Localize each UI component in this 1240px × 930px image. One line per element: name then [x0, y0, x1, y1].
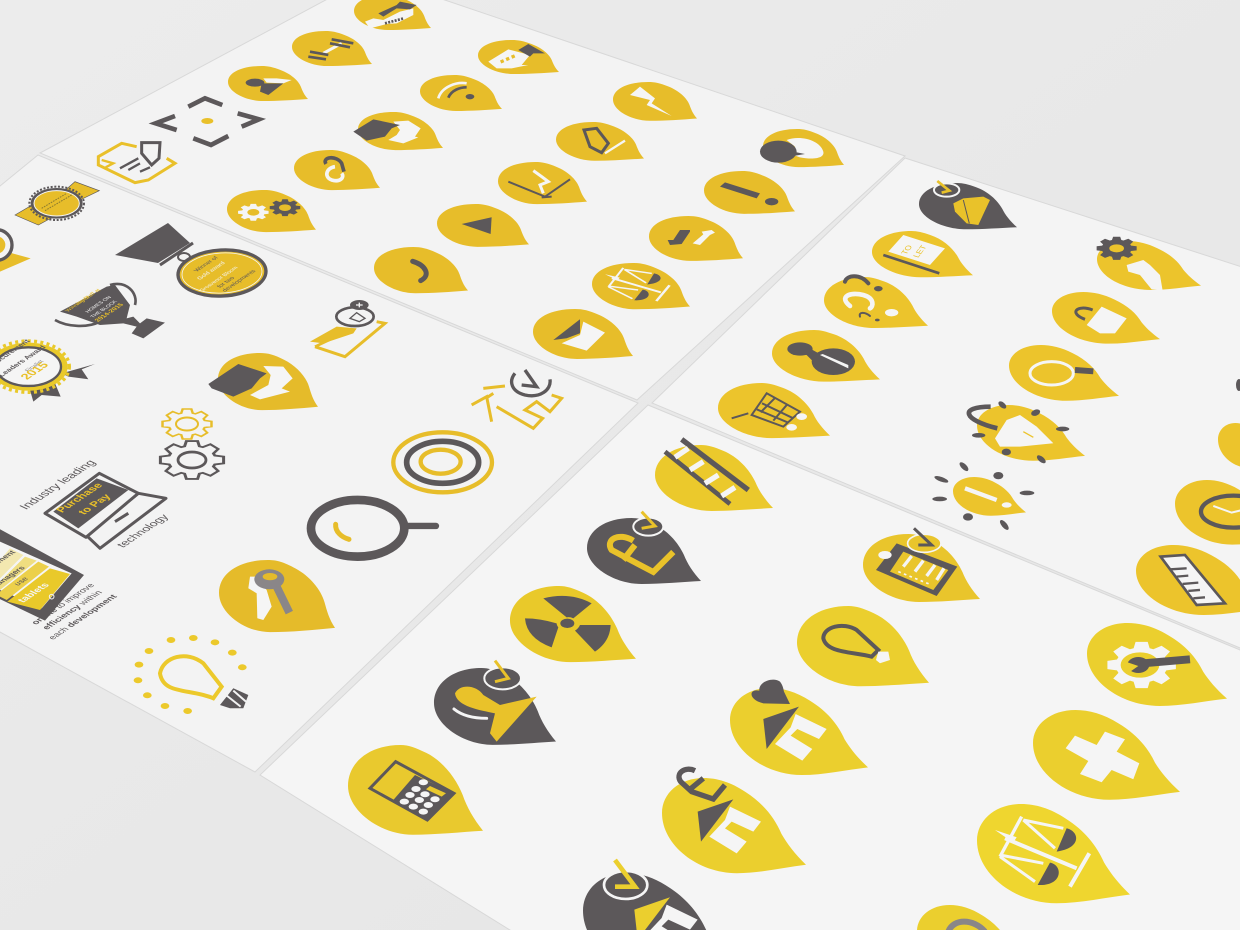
- to let text: LET: [911, 244, 929, 259]
- pin: wrench: [1097, 237, 1201, 291]
- pin: question marks: [824, 276, 928, 328]
- text: onsite note: efficiency within: [40, 589, 104, 631]
- pin: tick house: [583, 860, 733, 930]
- pin: cart: [718, 383, 830, 438]
- pin: phone: [374, 247, 468, 293]
- medal text: [193, 256, 258, 293]
- trophy text: HOMES ON: [84, 295, 113, 314]
- panel: top sheet: [40, 0, 905, 400]
- medal text: Gold award: [196, 261, 227, 281]
- pin: clipboard: [863, 528, 980, 602]
- pin: key: [219, 560, 335, 632]
- panel: bottom sheet: [260, 405, 1240, 930]
- pin: hard hat: [919, 181, 1017, 229]
- text: technology: technology: [115, 513, 172, 549]
- medal text: developments: [221, 269, 258, 293]
- text: onsite note: each development: [46, 593, 119, 641]
- trophy text: Winning Staff at: [64, 288, 103, 313]
- pin: lightning: [613, 82, 697, 121]
- icon: magnifier: [311, 500, 436, 557]
- pin: person with tie: [772, 330, 880, 382]
- pin: ladder: [655, 439, 773, 511]
- pin: graph: [498, 162, 587, 204]
- medal text: Grosvenor Bloom: [198, 266, 240, 293]
- icon: medal: [115, 223, 267, 298]
- pin: chat: [353, 112, 443, 150]
- pin: card: [478, 40, 559, 74]
- icon: focus brackets: [156, 98, 259, 145]
- pin: heart shield: [969, 400, 1085, 465]
- pin: play: [437, 204, 529, 247]
- pin: dumbbell: [292, 31, 372, 66]
- pin: speech cloud: [760, 129, 844, 167]
- icon: dark gear: [160, 441, 224, 479]
- pin: person: [228, 66, 308, 101]
- icon: house outline with tick: [472, 370, 562, 428]
- trophy text: Award: [74, 295, 92, 306]
- pin: exclamation: [704, 171, 795, 214]
- pin: chain link: [294, 150, 380, 190]
- icon: partial rosette: [0, 230, 31, 272]
- icon: tablet: [0, 528, 84, 621]
- pin: radiation: [510, 586, 636, 662]
- tablet text: use: [12, 576, 31, 587]
- pin: lock: [1052, 292, 1160, 344]
- icon: target rings: [393, 432, 492, 492]
- icon: mail outline: [310, 300, 385, 357]
- pin: search: [1009, 345, 1119, 401]
- to let text: [899, 244, 929, 259]
- tablet text: tablets: [16, 581, 53, 604]
- pin: pound house: [662, 769, 806, 873]
- pin: envelope: [533, 309, 633, 359]
- to let text: TO: [899, 244, 914, 256]
- trophy text: [64, 288, 126, 323]
- pin: heart house: [730, 680, 868, 775]
- pin: bulb: [797, 606, 929, 686]
- pin: gears: [227, 190, 316, 232]
- pin: person on call: [434, 661, 556, 745]
- pin: ruler: [1136, 545, 1240, 615]
- pin: calculator: [348, 745, 483, 835]
- trophy text: 2014-2015: [93, 302, 126, 323]
- icon: finalist rosette: [0, 338, 95, 402]
- text: industry leading: Industry leading: [16, 458, 99, 511]
- icon: light bulb with dots: [134, 635, 248, 714]
- text: onsite note: onsite to improve: [29, 582, 97, 626]
- rosette text: Finalist: [24, 360, 46, 373]
- trophy text: THE BLOCK: [89, 300, 120, 319]
- pin: handshake: [354, 0, 431, 30]
- pin: scales: [592, 263, 690, 309]
- laptop text: Purchase: [54, 482, 106, 514]
- panel: right sheet: [652, 158, 1240, 650]
- pin: to let: [872, 231, 973, 277]
- pin: wrench gear: [1087, 623, 1227, 706]
- panel: left sheet: [0, 155, 638, 772]
- pin: chat bubbles: [208, 353, 318, 410]
- pin: large scales: [977, 804, 1130, 903]
- pin: pound: [587, 512, 701, 584]
- text: onsite note: [29, 582, 119, 641]
- icon: trophy: [55, 284, 165, 338]
- medal text: Winner of: [193, 256, 220, 273]
- icon: yellow gear: [163, 409, 211, 439]
- icon: document outline: [98, 143, 175, 183]
- pin: bright exclamation: [932, 461, 1034, 531]
- pin: arrows: [649, 216, 743, 261]
- pin: wifi: [420, 75, 502, 111]
- rosette text: 2015: [17, 360, 52, 381]
- icon: award badge: [15, 182, 99, 225]
- pin: medical cross: [1033, 710, 1180, 800]
- pin: partial right: [1218, 379, 1240, 468]
- medal text: for two: [216, 276, 237, 289]
- pin: bottom partial: [917, 905, 1030, 930]
- tablet text: [0, 549, 53, 604]
- pin: pencil: [556, 122, 644, 161]
- laptop text: to Pay: [76, 492, 115, 516]
- icon: laptop: [45, 473, 166, 548]
- pin: clock: [1175, 480, 1240, 545]
